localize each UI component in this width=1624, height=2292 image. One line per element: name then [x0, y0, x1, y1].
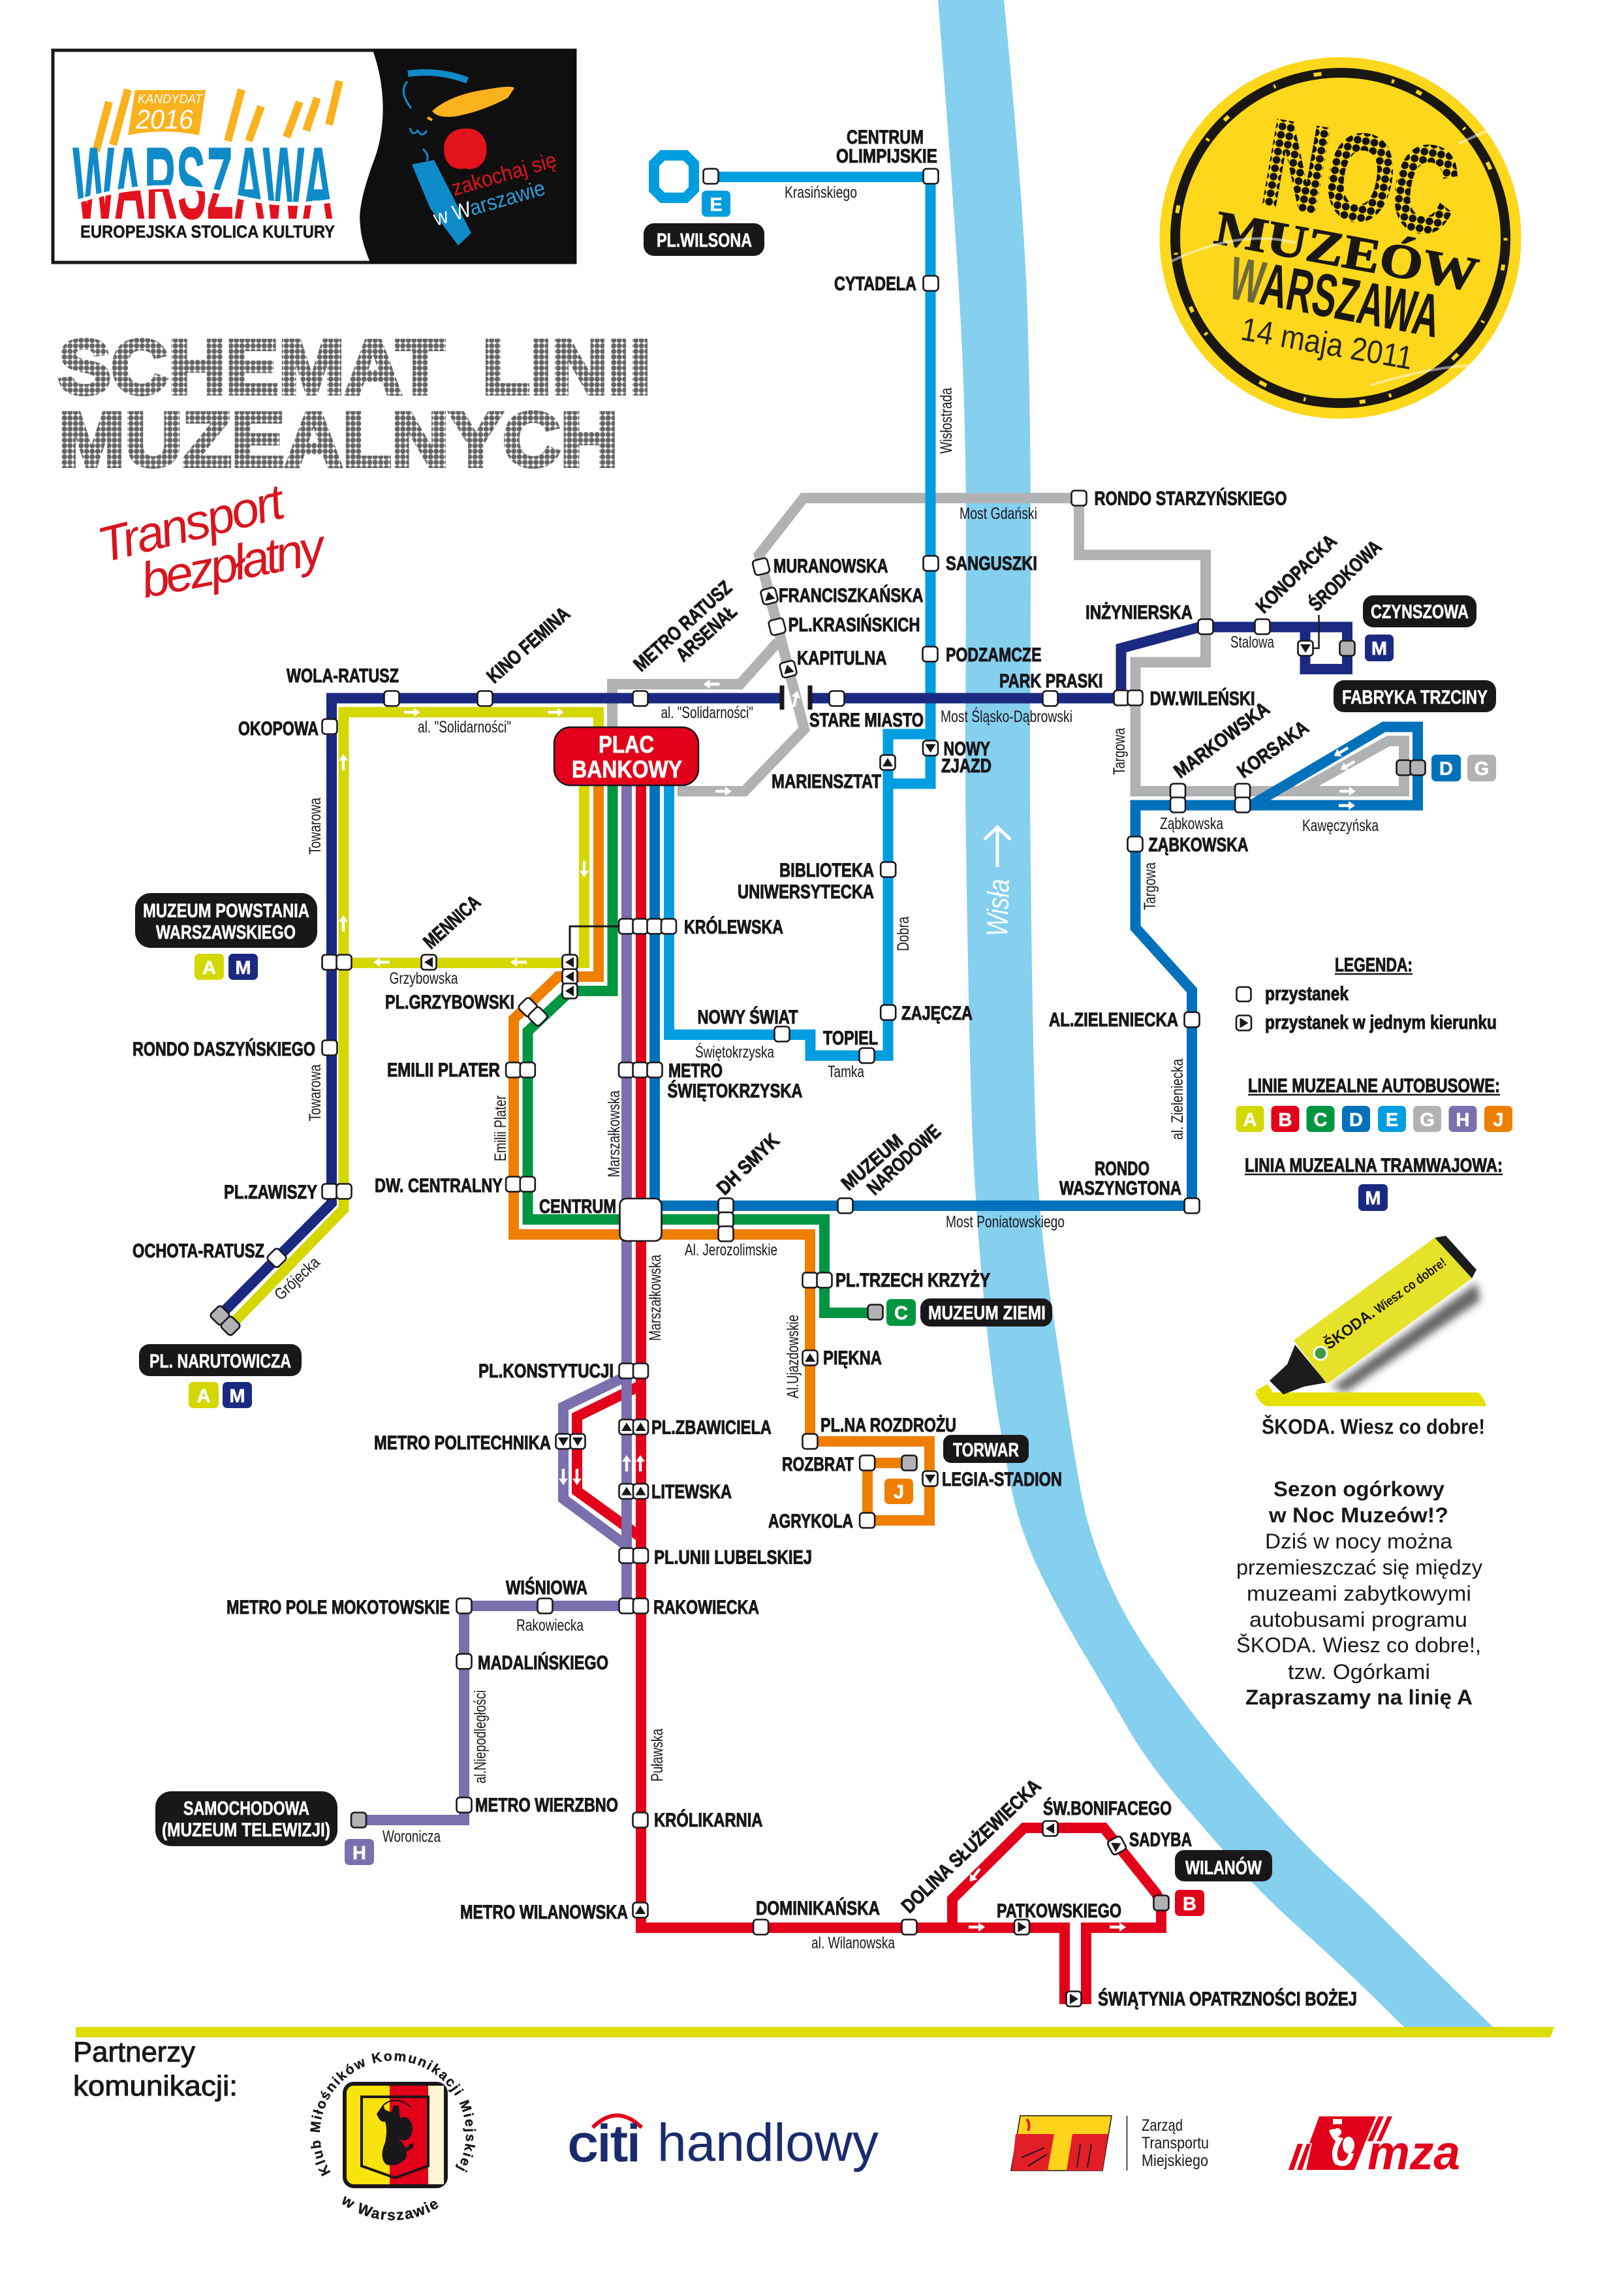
station labels: east: DH SMYK: [713, 1129, 784, 1199]
station labels: west and north: KRÓLEWSKA: [684, 916, 783, 938]
partner logo: Zarząd Transportu Miejskiego: Zarząd: [1142, 2116, 1183, 2135]
text block: Sezon ogórkowy: muzeami zabytkowymi: [1247, 1582, 1471, 1605]
partner logo: Klub Miłośników Komunikacji Miejskiej: Klub Miłośników Komunikacji Miejskiej: [310, 2052, 476, 2176]
street names: Emilii Plater: [492, 1095, 510, 1161]
title: Schemat linii muzealnych: MUZEALNYCH: [58, 397, 618, 483]
heading: Partnerzy komunikacji: [73, 2036, 238, 2102]
legend panel: J: [1493, 1110, 1504, 1131]
partner logo: Citi Handlowy: handlowy: [657, 2113, 879, 2173]
station labels: west and north: MARIENSZTAT: [772, 771, 881, 793]
station labels: west and north: CYTADELA: [834, 273, 916, 295]
text block: Sezon ogórkowy: przemieszczać się między: [1236, 1556, 1482, 1579]
text block: Sezon ogórkowy: [1236, 1477, 1482, 1709]
street names: Dobra: [894, 917, 913, 951]
legend panel: [1236, 954, 1512, 1211]
station labels: west and north: NOWY: [944, 738, 990, 760]
street names: Al. Jerozolimskie: [685, 1241, 777, 1259]
legend panel: G: [1420, 1110, 1435, 1131]
stop markers: [210, 168, 1425, 2007]
route: line G grey: [612, 498, 1404, 791]
logo: Warszawa Europejska Stolica Kultury: KANDYDAT: [138, 93, 203, 106]
highlighter illustration: Škoda: [1255, 1236, 1486, 1406]
station labels: south: PL.NA ROZDROŻU: [820, 1415, 956, 1436]
street names: Targowa: [1141, 862, 1159, 910]
terminus pills: MUZEUM POWSTANIA: [143, 900, 309, 922]
route: line B red: [577, 783, 1161, 2004]
station labels: west and north: DW. CENTRALNY: [375, 1175, 503, 1197]
line badges at termini: J: [894, 1482, 904, 1503]
line badges at termini: E: [710, 195, 723, 215]
station labels: east: DW.WILEŃSKI: [1150, 687, 1255, 710]
station labels: south: DOLINA SŁUŻEWIECKA: [898, 1775, 1045, 1917]
river: Wisła: [938, 0, 1493, 2027]
street names: Most Gdański: [960, 505, 1037, 523]
station labels: south: RAKOWIECKA: [653, 1597, 759, 1618]
station labels: west and north: [133, 127, 1287, 1262]
handwritten note: Transport bezpłatny: Transport: [93, 473, 291, 573]
street names: Woronicza: [383, 1828, 441, 1846]
footer divider bar: [76, 2027, 1554, 2037]
station labels: west and north: FRANCISZKAŃSKA: [779, 584, 923, 606]
logo: Warszawa Europejska Stolica Kultury: w Warszawie: [430, 176, 548, 230]
terminus pills: PL. NARUTOWICZA: [149, 1351, 291, 1372]
street names: Krasińskiego: [785, 183, 857, 202]
station labels: west and north: ZAJĘCZA: [901, 1003, 973, 1024]
terminus pills: [135, 223, 1496, 1881]
station labels: east: ŚRODKOWA: [1304, 536, 1386, 616]
highlighter illustration: Škoda: ŠKODA.: [1320, 1304, 1379, 1353]
station labels: west and north: EMILII PLATER: [387, 1060, 500, 1081]
street names: Ząbkowska: [1160, 815, 1223, 833]
street names: Marszałkowska: [605, 1090, 623, 1178]
station labels: east: KONOPACKA: [1252, 531, 1341, 618]
river label: Wisła with flow arrow: [980, 827, 1016, 937]
station labels: south: PATKOWSKIEGO: [997, 1900, 1121, 1922]
street names: Marszałkowska: [646, 1255, 664, 1341]
legend panel: LINIE MUZEALNE AUTOBUSOWE:: [1248, 1075, 1500, 1097]
route: line H purple: [360, 783, 627, 1820]
terminus pills: FABRYKA TRZCINY: [1342, 687, 1488, 708]
line badges at termini: M: [1371, 638, 1387, 659]
text block: Sezon ogórkowy: Dziś w nocy można: [1265, 1530, 1452, 1553]
terminus pills: PL.WILSONA: [657, 230, 752, 251]
station labels: west and north: UNIWERSYTECKA: [738, 881, 874, 903]
station labels: south: ROZBRAT: [782, 1454, 854, 1475]
street names: Most Poniatowskiego: [946, 1213, 1065, 1231]
station labels: west and north: OLIMPIJSKIE: [836, 146, 937, 167]
street names: al. "Solidarności": [661, 704, 753, 722]
station labels: west and north: PL.KRASIŃSKICH: [789, 614, 920, 636]
street names: Tamka: [828, 1063, 864, 1081]
street names: Most Śląsko-Dąbrowski: [941, 706, 1072, 726]
handwritten note: Transport bezpłatny: [93, 473, 332, 609]
station labels: south: METRO POLITECHNIKA: [374, 1432, 551, 1454]
text block: Sezon ogórkowy: Zapraszamy na linię A: [1245, 1686, 1473, 1709]
station labels: east: MARKOWSKA: [1170, 698, 1273, 783]
line badges at termini: G: [1475, 759, 1489, 779]
heading: Partnerzy komunikacji: komunikacji:: [73, 2070, 238, 2102]
main hub sign: Plac Bankowy: BANKOWY: [572, 756, 682, 783]
text block: Sezon ogórkowy: tzw. Ogórkami: [1288, 1660, 1430, 1684]
direction arrows: [339, 680, 1357, 1932]
street names: Kawęczyńska: [1302, 817, 1379, 835]
station labels: west and north: PODZAMCZE: [946, 644, 1042, 666]
text block: Sezon ogórkowy: autobusami programu: [1249, 1608, 1467, 1631]
station labels: west and north: OKOPOWA: [238, 718, 319, 740]
station labels: west and north: KAPITULNA: [797, 648, 886, 669]
route: line C green: [527, 783, 875, 1313]
line badges at termini: A: [202, 958, 216, 979]
logo: Warszawa Europejska Stolica Kultury: zakochaj się: [449, 148, 559, 200]
sticker: Noc Muzeów Warszawa: WARSZAWA: [1224, 243, 1446, 351]
partner logo: Zarząd Transportu Miejskiego: Transportu: [1142, 2134, 1209, 2152]
highlighter illustration: Škoda: Wiesz co dobre!: [1372, 1255, 1449, 1317]
station labels: south: PIĘKNA: [823, 1347, 882, 1369]
station labels: east: ZĄBKOWSKA: [1149, 834, 1248, 856]
terminus pills: (MUZEUM TELEWIZJI): [162, 1819, 330, 1841]
line badges at termini: B: [1183, 1894, 1196, 1915]
route: line J orange: [514, 783, 929, 1520]
route: line E light blue: [654, 155, 931, 1056]
station labels: west and north: METRO RATUSZ: [630, 577, 736, 676]
station labels: east: KORSAKA: [1234, 717, 1313, 783]
street names: al. Wilanowska: [811, 1934, 895, 1952]
street names: Towarowa: [306, 1064, 324, 1122]
central stop: Centrum hub: [620, 1199, 662, 1241]
station labels: west and north: RONDO STARZYŃSKIEGO: [1094, 487, 1287, 509]
logo: Warszawa Europejska Stolica Kultury: [53, 49, 576, 264]
line badges at termini: H: [352, 1843, 366, 1864]
station labels: west and north: PARK PRASKI: [999, 670, 1103, 692]
street names: al. Zieleniecka: [1168, 1059, 1187, 1140]
station labels: west and north: KINO FEMINA: [483, 603, 574, 687]
metro crossing bars and connector: [570, 615, 1319, 956]
street names: al. "Solidarności": [418, 718, 511, 736]
station labels: south: PL.ZBAWICIELA: [651, 1417, 772, 1439]
station labels: west and north: WOLA-RATUSZ: [287, 665, 399, 687]
station labels: east: MUZEUM: [837, 1130, 907, 1195]
station labels: west and north: SANGUSZKI: [946, 553, 1037, 574]
station labels: south: LITEWSKA: [651, 1481, 732, 1503]
station labels: west and north: PL.GRZYBOWSKI: [385, 992, 514, 1013]
station labels: south: DOMINIKAŃSKA: [756, 1897, 880, 1919]
street names: Świętokrzyska: [695, 1042, 774, 1061]
station labels: east: WASZYNGTONA: [1059, 1178, 1181, 1199]
station labels: south: PL.TRZECH KRZYŻY: [835, 1270, 990, 1291]
legend panel: C: [1314, 1110, 1328, 1131]
station labels: west and north: OCHOTA-RATUSZ: [133, 1240, 264, 1262]
terminus pills: CZYNSZOWA: [1371, 601, 1469, 623]
logo: Warszawa Europejska Stolica Kultury: EUROPEJSKA STOLICA KULTURY: [80, 222, 335, 242]
station labels: south: WIŚNIOWA: [506, 1577, 587, 1599]
station labels: west and north: TOPIEL: [823, 1028, 878, 1049]
station labels: west and north: NOWY ŚWIAT: [697, 1006, 798, 1028]
station labels: east: INŻYNIERSKA: [1085, 602, 1193, 623]
partner logo: MZA: mza: [1367, 2126, 1460, 2180]
legend panel: A: [1243, 1110, 1257, 1131]
route: line A yellow-green: [230, 712, 599, 1326]
terminus pills: TORWAR: [953, 1439, 1019, 1461]
street names: Rakowiecka: [516, 1616, 584, 1635]
station labels: south: METRO WILANOWSKA: [460, 1902, 628, 1923]
station labels: east: [713, 531, 1386, 1199]
street names: al.Niepodległości: [471, 1690, 490, 1783]
station labels: west and north: ZJAZD: [941, 755, 992, 777]
text block: Sezon ogórkowy: w Noc Muzeów!?: [1268, 1503, 1448, 1527]
heading: Partnerzy komunikacji: Partnerzy: [73, 2036, 195, 2068]
logo: Warszawa Europejska Stolica Kultury: WARSZAWA: [75, 126, 334, 241]
legend panel: LEGENDA:: [1335, 954, 1413, 976]
slogan: Škoda. Wiesz co dobre!: ŠKODA. Wiesz co dobre!: [1262, 1415, 1485, 1439]
station labels: south: [226, 1270, 1357, 2010]
line badges at termini: A: [197, 1386, 211, 1407]
street names: Wisłostrada: [937, 388, 956, 454]
sticker: Noc Muzeów Warszawa: [1159, 57, 1521, 419]
legend panel: M: [1365, 1188, 1381, 1209]
main hub sign: Plac Bankowy: [554, 727, 698, 785]
logo: Warszawa Europejska Stolica Kultury: 2016: [135, 104, 194, 134]
street names: Stalowa: [1230, 633, 1274, 651]
station labels: south: SADYBA: [1129, 1829, 1192, 1851]
legend panel: H: [1456, 1110, 1469, 1131]
main hub sign: Plac Bankowy: PLAC: [599, 731, 654, 758]
street names: [271, 183, 1379, 1952]
partner logo: Klub Miłośników Komunikacji Miejskiej: w Warszawie: [342, 2196, 439, 2221]
legend panel: przystanek: [1265, 983, 1349, 1005]
station labels: south: KRÓLIKARNIA: [654, 1809, 762, 1831]
legend panel: przystanek w jednym kierunku: [1265, 1012, 1497, 1033]
title: Schemat linii muzealnych: SCHEMAT: [58, 324, 445, 411]
street names: Puławska: [648, 1729, 666, 1782]
station labels: south: PL.KONSTYTUCJI: [478, 1360, 614, 1382]
station labels: west and north: PL.ZAWISZY: [224, 1182, 317, 1203]
station labels: west and north: BIBLIOTEKA: [779, 860, 874, 881]
station labels: west and north: RONDO DASZYŃSKIEGO: [133, 1038, 315, 1060]
station labels: west and north: CENTRUM: [847, 127, 924, 148]
terminus pills: WILANÓW: [1185, 1857, 1262, 1879]
station labels: south: PL.UNII LUBELSKIEJ: [654, 1547, 812, 1568]
line badges at termini: M: [229, 1386, 245, 1407]
line badges at termini: [189, 191, 1496, 1916]
terminus pills: MUZEUM ZIEMI: [928, 1302, 1046, 1324]
street names: Targowa: [1110, 728, 1129, 775]
sticker: Noc Muzeów Warszawa: MUZEÓW: [1211, 201, 1482, 302]
station labels: south: MADALIŃSKIEGO: [478, 1652, 608, 1674]
text block: Sezon ogórkowy: Sezon ogórkowy: [1273, 1477, 1444, 1501]
title: Schemat linii muzealnych: [52, 324, 659, 483]
terminus pills: SAMOCHODOWA: [183, 1798, 309, 1819]
station labels: south: AGRYKOLA: [768, 1511, 853, 1532]
line badges at termini: C: [894, 1303, 908, 1324]
street names: Towarowa: [306, 798, 324, 855]
partner logo: Citi Handlowy: citi: [568, 2114, 640, 2172]
station labels: south: ŚWIĄTYNIA OPATRZNOŚCI BOŻEJ: [1098, 1988, 1357, 2010]
partner logo: Zarząd Transportu Miejskiego: [1011, 2116, 1209, 2171]
legend panel: E: [1386, 1110, 1398, 1131]
station labels: south: METRO WIERZBNO: [475, 1795, 618, 1816]
partner logo: Zarząd Transportu Miejskiego: Miejskiego: [1142, 2152, 1208, 2170]
station labels: west and north: METRO: [668, 1060, 723, 1082]
station labels: west and north: ŚWIĘTOKRZYSKA: [667, 1080, 803, 1102]
street names: Grójecka: [271, 1253, 324, 1304]
station labels: west and north: MENNICA: [420, 891, 485, 953]
street names: Grzybowska: [389, 969, 458, 988]
station labels: east: AL.ZIELENIECKA: [1049, 1009, 1178, 1031]
legend panel: LINIA MUZEALNA TRAMWAJOWA:: [1245, 1155, 1503, 1176]
river label: Wisła with flow arrow: Wisła: [980, 879, 1016, 937]
station labels: west and north: ARSENAŁ: [672, 601, 742, 666]
logo: Warszawa Europejska Stolica Kultury: WARSZAWA: [72, 126, 334, 241]
route: line D blue: [655, 727, 1418, 1206]
terminus pills: WARSZAWSKIEGO: [156, 922, 296, 943]
station labels: east: NARODOWE: [863, 1121, 945, 1199]
station labels: west and north: MURANOWSKA: [773, 556, 888, 577]
text block: Sezon ogórkowy: ŠKODA. Wiesz co dobre!,: [1236, 1633, 1481, 1657]
line badges at termini: M: [235, 958, 251, 979]
station labels: south: LEGIA-STADION: [942, 1469, 1062, 1490]
sticker: Noc Muzeów Warszawa: NOC: [1254, 95, 1467, 261]
street names: Al.Ujazdowskie: [784, 1315, 802, 1398]
partner logo: MZA: [1288, 2116, 1460, 2180]
line badges at termini: D: [1439, 759, 1453, 779]
station labels: south: METRO POLE MOKOTOWSKIE: [226, 1597, 450, 1618]
handwritten note: Transport bezpłatny: bezpłatny: [136, 518, 332, 609]
legend panel: D: [1349, 1110, 1363, 1131]
sticker: Noc Muzeów Warszawa: 14 maja 2011: [1238, 311, 1416, 377]
station labels: west and north: CENTRUM: [539, 1196, 616, 1217]
station labels: south: ŚW.BONIFACEGO: [1043, 1797, 1172, 1819]
station labels: west and north: STARE MIASTO: [809, 710, 924, 731]
route: line M navy: [220, 627, 1347, 1315]
station labels: east: RONDO: [1095, 1158, 1149, 1180]
legend panel: B: [1279, 1110, 1292, 1131]
title: Schemat linii muzealnych: LINII: [482, 324, 651, 411]
